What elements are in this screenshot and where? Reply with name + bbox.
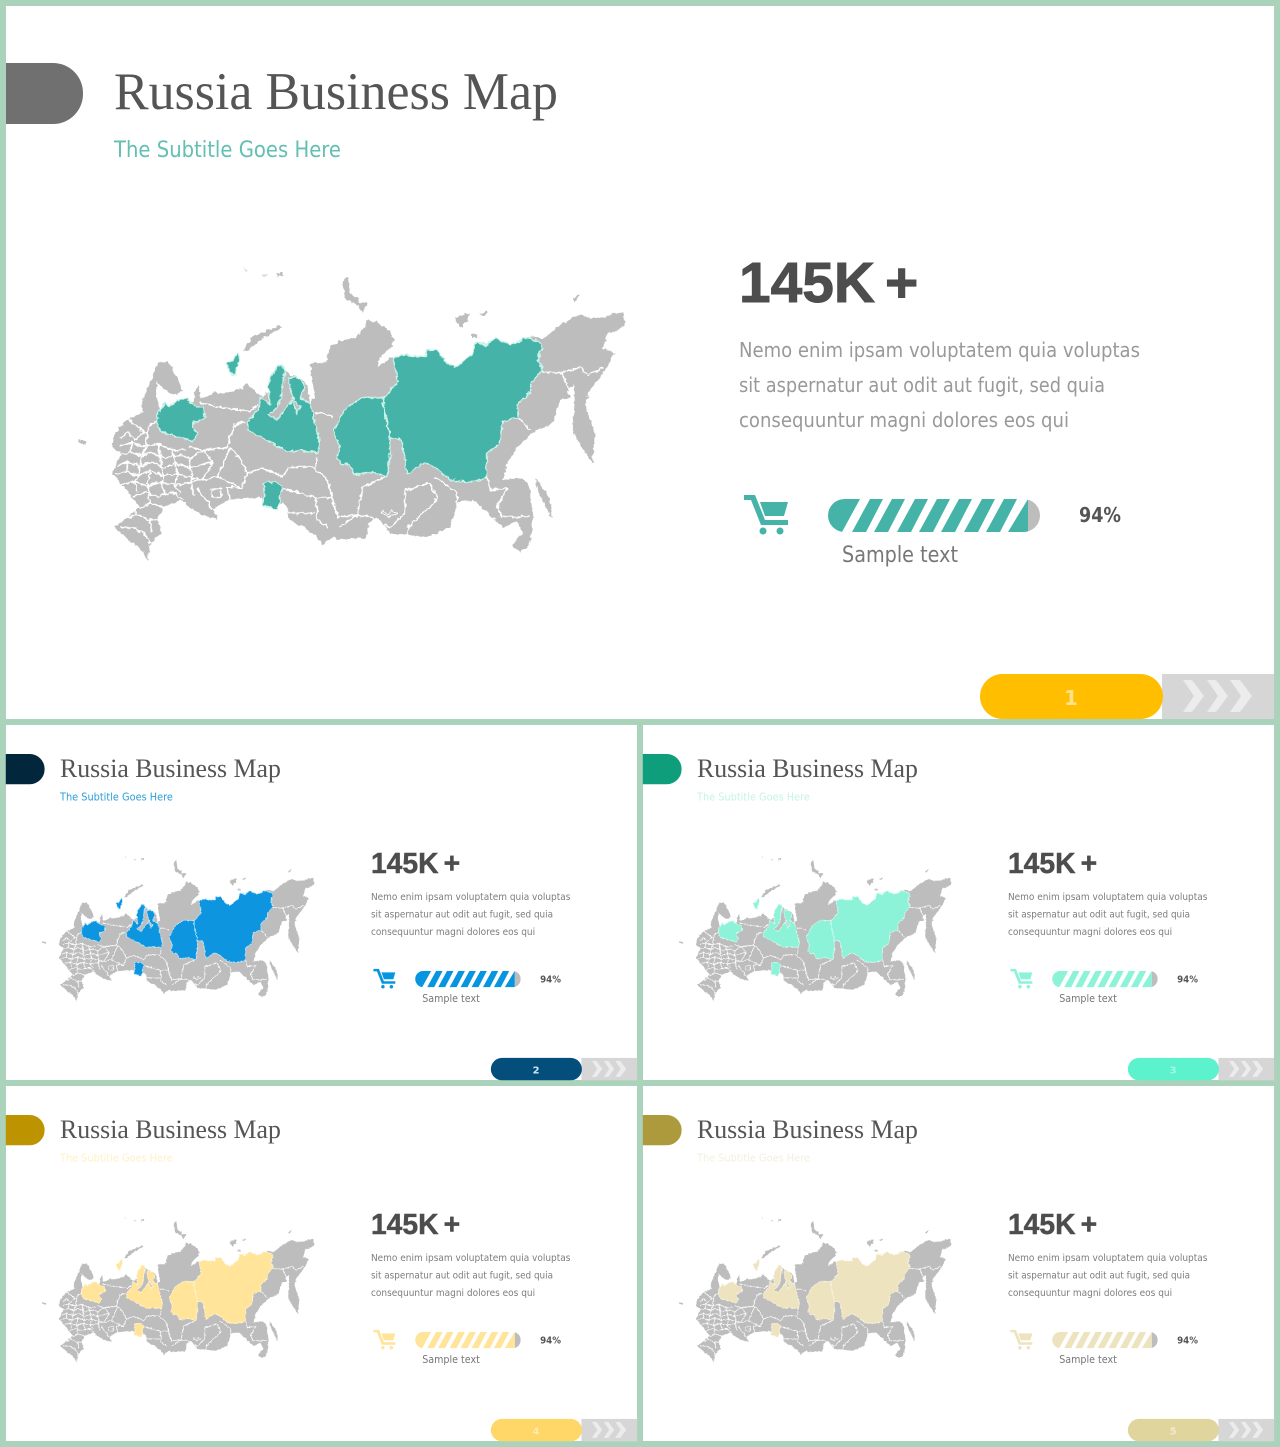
description text: sit aspernatur aut odit aut fugit, sed quia	[371, 1271, 553, 1282]
percentage: 94%	[1177, 974, 1198, 985]
progress bar 94%	[1048, 971, 1158, 987]
panel: slide 1	[6, 6, 1274, 719]
big number: +	[444, 848, 460, 880]
header tab	[643, 1115, 682, 1145]
description text	[1008, 892, 1207, 938]
description text	[739, 338, 1140, 432]
slide 3 content	[643, 754, 1274, 1080]
title: Russia Business Map	[697, 1115, 918, 1144]
page number pill	[980, 674, 1163, 719]
panel: slide 2	[6, 725, 637, 1080]
description text: consequuntur magni dolores eos qui	[371, 1288, 535, 1299]
arrows strip	[1162, 674, 1274, 719]
description text: sit aspernatur aut odit aut fugit, sed quia	[739, 373, 1105, 397]
page number pill	[1128, 1058, 1219, 1080]
description text: consequuntur magni dolores eos qui	[739, 408, 1069, 432]
page number pill	[491, 1058, 582, 1080]
big number: 145K	[371, 1209, 439, 1241]
page number pill: 4	[533, 1426, 540, 1437]
title: Russia Business Map	[114, 63, 558, 121]
progress label: Sample text	[422, 1353, 481, 1366]
map of Russia	[679, 855, 951, 1002]
percentage: 94%	[540, 1335, 561, 1346]
description text: sit aspernatur aut odit aut fugit, sed quia	[1008, 910, 1190, 921]
description text: consequuntur magni dolores eos qui	[1008, 1288, 1172, 1299]
map of Russia	[78, 267, 625, 562]
big number: 145K	[371, 848, 439, 880]
description text: Nemo enim ipsam voluptatem quia voluptas	[371, 1253, 570, 1264]
description text: Nemo enim ipsam voluptatem quia voluptas	[1008, 892, 1207, 903]
title: Russia Business Map	[60, 1115, 281, 1144]
page number pill	[1128, 1419, 1219, 1441]
icon: cart	[744, 495, 788, 534]
header tab	[6, 63, 83, 124]
page number pill: 3	[1170, 1065, 1177, 1076]
page number pill: 2	[533, 1065, 540, 1076]
subtitle: The Subtitle Goes Here	[696, 1152, 810, 1165]
panel: slide 3	[643, 725, 1274, 1080]
title: Russia Business Map	[697, 754, 918, 783]
big number: +	[444, 1209, 460, 1241]
progress label: Sample text	[1059, 1353, 1118, 1366]
description text: consequuntur magni dolores eos qui	[1008, 927, 1172, 938]
subtitle: The Subtitle Goes Here	[696, 791, 810, 804]
progress bar 94%	[820, 499, 1040, 532]
percentage: 94%	[1079, 503, 1121, 527]
description text: Nemo enim ipsam voluptatem quia voluptas	[371, 892, 570, 903]
big number: +	[1081, 848, 1097, 880]
page number pill: 1	[1064, 686, 1078, 710]
big number: +	[1081, 1209, 1097, 1241]
description text: consequuntur magni dolores eos qui	[371, 927, 535, 938]
arrows strip	[581, 1058, 637, 1080]
progress label: Sample text	[842, 543, 958, 568]
description text	[371, 892, 570, 938]
progress bar 94%	[1048, 1332, 1158, 1348]
description text: sit aspernatur aut odit aut fugit, sed quia	[371, 910, 553, 921]
header tab	[6, 1115, 45, 1145]
panel: slide 4	[6, 1086, 637, 1441]
icon: cart	[1010, 969, 1032, 989]
header tab	[643, 754, 682, 784]
percentage: 94%	[1177, 1335, 1198, 1346]
big number: +	[885, 251, 918, 315]
panel: slide 5	[643, 1086, 1274, 1441]
map of Russia	[42, 1216, 314, 1363]
header tab	[6, 754, 45, 784]
subtitle: The Subtitle Goes Here	[113, 138, 341, 163]
arrows strip	[1218, 1419, 1274, 1441]
progress label: Sample text	[1059, 992, 1118, 1005]
slide 5 content	[643, 1115, 1274, 1441]
page number pill: 5	[1170, 1426, 1177, 1437]
arrows strip	[581, 1419, 637, 1441]
description text	[1008, 1253, 1207, 1299]
icon: cart	[373, 969, 395, 989]
icon: cart	[1010, 1330, 1032, 1350]
progress label: Sample text	[422, 992, 481, 1005]
subtitle: The Subtitle Goes Here	[59, 791, 173, 804]
map of Russia	[42, 855, 314, 1002]
subtitle: The Subtitle Goes Here	[59, 1152, 173, 1165]
description text: Nemo enim ipsam voluptatem quia voluptas	[739, 338, 1140, 362]
slide 2 content	[6, 754, 637, 1080]
percentage: 94%	[540, 974, 561, 985]
description text	[371, 1253, 570, 1299]
map of Russia	[679, 1216, 951, 1363]
big number: 145K	[739, 251, 875, 315]
big number: 145K	[1008, 1209, 1076, 1241]
big number: 145K	[1008, 848, 1076, 880]
slide 4 content	[6, 1115, 637, 1441]
description text: sit aspernatur aut odit aut fugit, sed quia	[1008, 1271, 1190, 1282]
description text: Nemo enim ipsam voluptatem quia voluptas	[1008, 1253, 1207, 1264]
icon: cart	[373, 1330, 395, 1350]
progress bar 94%	[411, 971, 521, 987]
title: Russia Business Map	[60, 754, 281, 783]
page number pill	[491, 1419, 582, 1441]
arrows strip	[1218, 1058, 1274, 1080]
progress bar 94%	[411, 1332, 521, 1348]
